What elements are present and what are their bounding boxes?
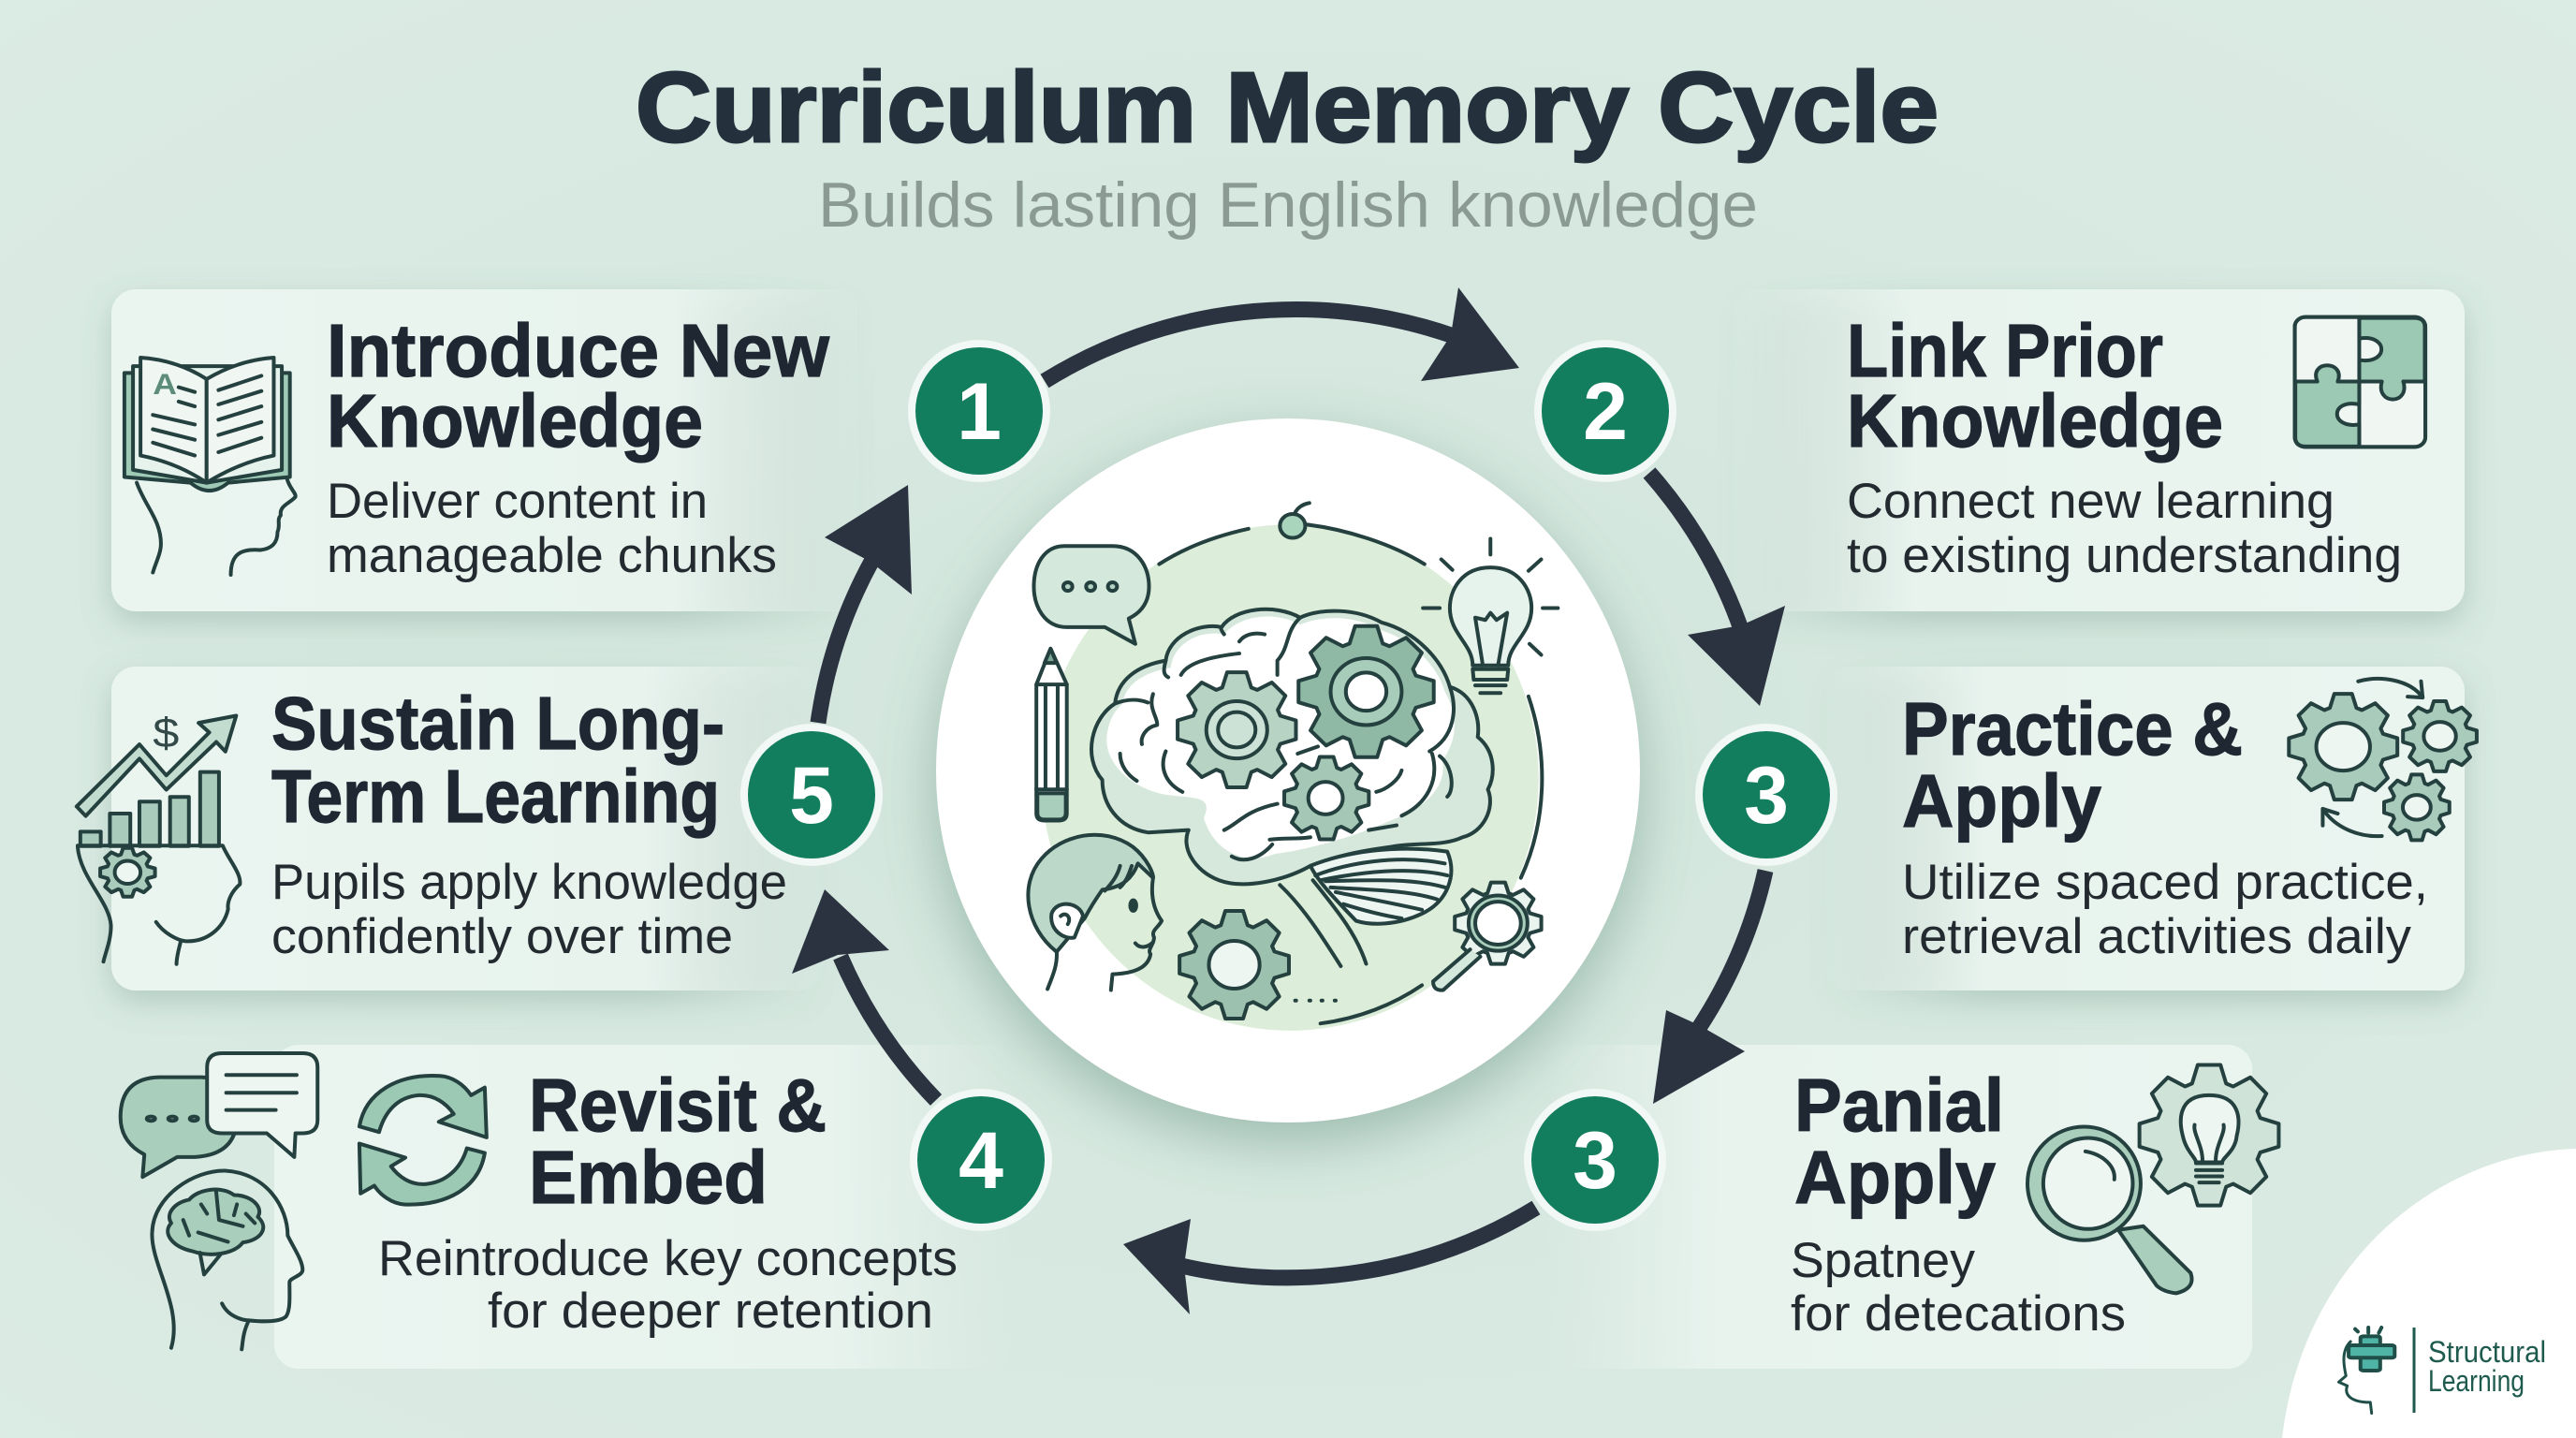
body text: retrieval activities daily — [1902, 909, 2412, 964]
panel: introduce new knowledge — [111, 289, 860, 611]
number badge 1 — [908, 340, 1050, 482]
body text: manageable chunks — [327, 528, 777, 583]
heading: Apply — [1794, 1136, 1996, 1219]
magnifier gear — [1455, 883, 1542, 964]
heading: Introduce New — [327, 309, 830, 392]
arrow 5 to 1 — [818, 485, 912, 723]
gear 4 — [1179, 911, 1289, 1019]
cerebellum — [1310, 849, 1451, 924]
arrow 3 to 3 — [1653, 871, 1765, 1104]
heading — [271, 682, 724, 838]
number badge 3 lower — [1524, 1089, 1666, 1231]
icon: chart above head: $ — [153, 711, 179, 756]
body text — [327, 474, 777, 583]
heading — [327, 309, 830, 462]
logo mark — [2339, 1328, 2394, 1414]
speech bubble — [1033, 546, 1149, 644]
logo wordmark: Structural — [2428, 1335, 2546, 1369]
brain stem — [1280, 880, 1366, 966]
icon: open book above head: A — [153, 369, 177, 401]
gear 1 — [1178, 672, 1295, 787]
heading: Revisit & — [529, 1064, 827, 1147]
pencil — [1036, 649, 1067, 820]
number badge 1: 1 — [957, 367, 1002, 457]
icon: puzzle — [2295, 317, 2425, 447]
icon: gear with light bulb — [2140, 1064, 2278, 1206]
panel: sustain long-term learning — [77, 667, 823, 990]
number badge 2 — [1534, 340, 1676, 482]
number badge 4: 4 — [959, 1116, 1003, 1206]
body text: for deeper retention — [488, 1284, 933, 1339]
icon: open book above head — [124, 358, 296, 575]
heading — [1847, 309, 2223, 462]
arrow 1 to 2 — [1045, 287, 1519, 381]
body text: Connect new learning — [1847, 474, 2334, 529]
gear 3 — [1284, 756, 1368, 839]
child — [1028, 835, 1153, 952]
body text: Reintroduce key concepts — [378, 1231, 958, 1286]
body text: confidently over time — [271, 909, 733, 964]
body text — [1791, 1233, 2126, 1342]
logo wordmark: Learning — [2428, 1364, 2525, 1398]
body text: to existing understanding — [1847, 528, 2402, 583]
number badge 5 — [740, 724, 883, 866]
subtitle: Builds lasting English knowledge — [818, 169, 1758, 241]
panel: revisit and embed — [121, 1045, 1014, 1369]
panel: link prior knowledge — [1732, 289, 2465, 611]
logo corner — [2282, 1149, 2576, 1438]
number badge 3 — [1695, 724, 1837, 866]
title: Curriculum Memory Cycle — [636, 52, 1939, 163]
heading: Link Prior — [1847, 309, 2163, 392]
arrow 3 to 4 — [1123, 1208, 1536, 1314]
arrow 4 to 5 — [792, 889, 936, 1100]
heading — [1902, 687, 2243, 843]
body text: Pupils apply knowledge — [271, 855, 787, 910]
logo divider — [2413, 1328, 2415, 1413]
number badge 2: 2 — [1583, 367, 1628, 457]
brain — [1091, 609, 1493, 884]
heading: Embed — [529, 1136, 768, 1219]
icon: refresh arrows — [359, 1076, 487, 1205]
gear 2 — [1298, 626, 1434, 757]
number badge 3: 3 — [1744, 751, 1789, 841]
cycle arrows — [792, 287, 1785, 1314]
body text: Utilize spaced practice, — [1902, 855, 2428, 910]
number badge 3 lower: 3 — [1573, 1116, 1617, 1206]
heading — [1794, 1064, 2004, 1219]
body text: for detecations — [1791, 1286, 2126, 1342]
orbit arc — [1159, 524, 1542, 1023]
logo wordmark — [2428, 1335, 2546, 1398]
light bulb — [1450, 567, 1531, 666]
heading: Knowledge — [1847, 379, 2223, 462]
body text: Spatney — [1791, 1233, 1976, 1288]
icon: magnifying glass — [2027, 1127, 2192, 1293]
body text — [1902, 855, 2428, 964]
heading: Term Learning — [271, 755, 720, 838]
central illustration — [936, 418, 1640, 1123]
icon: speech bubbles and head — [121, 1053, 317, 1349]
panel: panial apply — [1544, 1045, 2278, 1369]
body text — [378, 1231, 958, 1339]
body text — [1847, 474, 2402, 583]
heading: Knowledge — [327, 379, 703, 462]
arrow 2 to 3 — [1649, 473, 1785, 706]
heading: Sustain Long- — [271, 682, 724, 765]
panel: practice and apply — [1825, 667, 2477, 990]
green backdrop — [1042, 524, 1539, 1031]
body text: Deliver content in — [327, 474, 708, 529]
icon: chart above head — [77, 711, 240, 964]
heading: Practice & — [1902, 687, 2243, 770]
number badge 5: 5 — [789, 751, 834, 841]
heading: Apply — [1902, 759, 2101, 843]
heading: Panial — [1794, 1064, 2004, 1147]
number badge 4 — [910, 1089, 1052, 1231]
body text — [271, 855, 787, 964]
icon: three gears — [2289, 679, 2477, 840]
heading — [529, 1064, 827, 1219]
